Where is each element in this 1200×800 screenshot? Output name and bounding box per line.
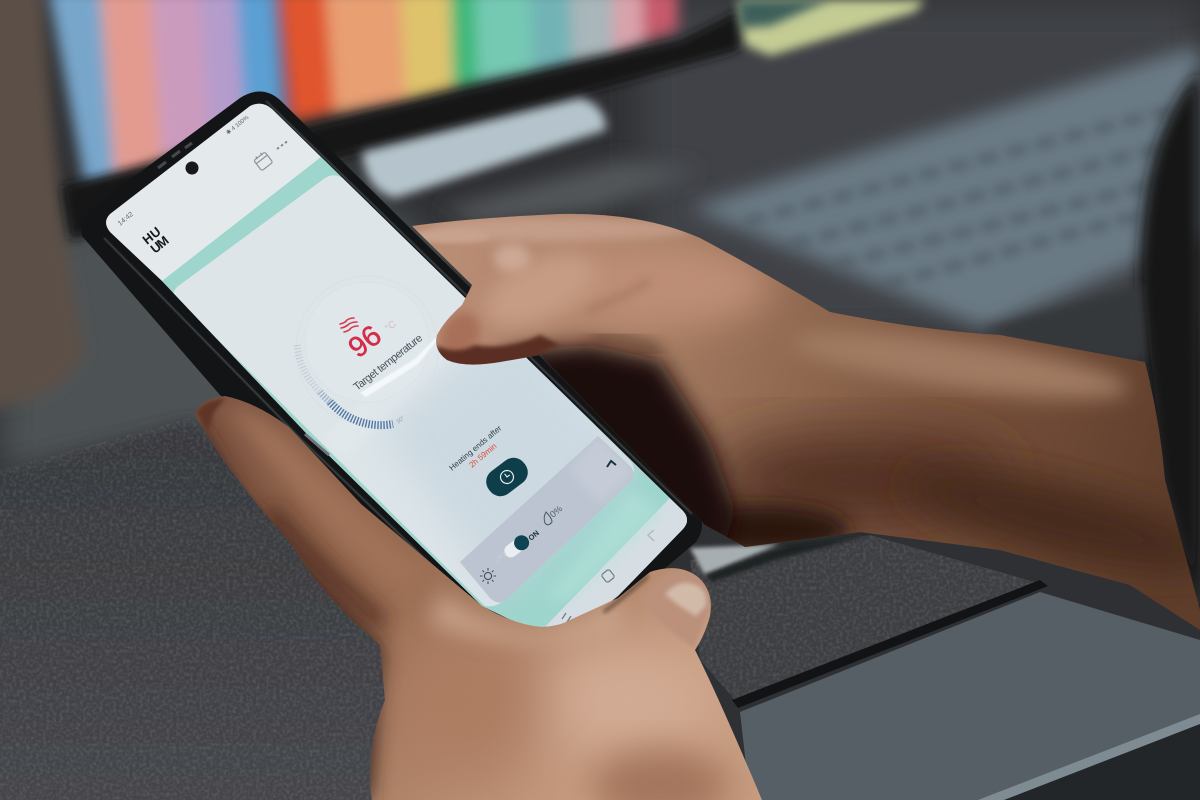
bottom control panel bbox=[460, 436, 634, 603]
yellow-green object at top bbox=[738, 0, 925, 56]
more dots bbox=[277, 142, 287, 149]
screen reflection bbox=[557, 498, 660, 597]
thumb underside shadow bbox=[180, 415, 385, 800]
speaker grille on phone edge bbox=[158, 143, 192, 168]
black mat edge bbox=[732, 580, 1048, 708]
thumb tip bbox=[432, 305, 488, 365]
thumb mid crease bbox=[270, 510, 385, 625]
tick label: 30° bbox=[396, 415, 407, 426]
off label: OFF bbox=[494, 550, 509, 565]
gauge light blue ticks bbox=[320, 392, 330, 402]
HUUM logo: HU bbox=[139, 224, 164, 247]
calendar icon bbox=[254, 152, 273, 171]
humidity icon and value bbox=[544, 506, 562, 526]
nav menu bars bbox=[562, 612, 572, 622]
sun icon bbox=[480, 568, 496, 584]
on label: ON bbox=[527, 528, 541, 543]
remaining time: 2h 59min bbox=[468, 441, 499, 470]
palm light bbox=[520, 640, 720, 760]
book spines on shelf bbox=[48, 0, 678, 185]
navigation bar bbox=[545, 498, 687, 627]
dark person silhouette right bbox=[1140, 70, 1200, 620]
dark shelf edge bbox=[62, 10, 740, 240]
heating ends label: Heating ends after bbox=[448, 423, 504, 473]
dark desk strip below keyboard bbox=[980, 285, 1145, 360]
nav back chevron bbox=[648, 530, 654, 541]
phone screen bbox=[106, 104, 687, 627]
thumb underside bbox=[436, 335, 560, 370]
left grey floor band bbox=[0, 170, 460, 480]
on off toggle bbox=[504, 535, 530, 558]
timer button bbox=[486, 458, 528, 496]
thumb top light bbox=[225, 405, 430, 590]
back of hand highlight bbox=[550, 243, 770, 327]
thumbnail shadow bbox=[196, 398, 226, 432]
pale blurred device on desk bbox=[362, 98, 606, 198]
nav home square bbox=[601, 569, 615, 583]
knuckle highlight bbox=[494, 244, 530, 272]
HUUM logo bbox=[142, 226, 170, 252]
felt desk mat bbox=[0, 400, 1050, 800]
front camera bbox=[186, 162, 198, 174]
heat waves icon bbox=[340, 318, 358, 332]
upper finger highlight bbox=[430, 218, 690, 242]
status bar time: 14:42 bbox=[117, 211, 135, 228]
wrist top light bbox=[788, 318, 1132, 412]
degree unit: °C bbox=[383, 319, 399, 334]
light strip above mat bbox=[690, 544, 780, 575]
fingers behind phone bbox=[410, 229, 490, 243]
thumb body light bbox=[473, 237, 607, 343]
gauge blue ticks bbox=[330, 402, 393, 425]
gauge inner circle bbox=[305, 282, 429, 402]
bottom finger shadow on phone bbox=[604, 576, 648, 612]
wrist shadow bbox=[710, 434, 1010, 526]
phone edge highlight bbox=[104, 101, 692, 612]
teal app background bbox=[162, 157, 695, 645]
target temperature label: Target temperature bbox=[351, 332, 425, 393]
fingertip bbox=[640, 570, 712, 648]
gauge grey ticks bbox=[297, 345, 320, 392]
keyboard bbox=[690, 45, 1200, 328]
white temperature card bbox=[174, 175, 634, 606]
card shading bbox=[390, 358, 637, 592]
right hand with thumb bbox=[412, 214, 1200, 630]
humidity icon and value: 0% bbox=[548, 504, 564, 520]
fingernail bbox=[665, 583, 706, 616]
thumb crease bbox=[590, 338, 660, 350]
left hand over phone bbox=[180, 390, 780, 800]
dark desk surface upper right bbox=[640, 0, 1200, 340]
phone contact highlight bbox=[430, 590, 622, 644]
gauge outer ring bbox=[344, 334, 438, 424]
chevron up bbox=[607, 461, 616, 467]
brown object at far left bbox=[0, 0, 85, 410]
dark palm shadow behind phone bbox=[500, 345, 735, 560]
glare over label bbox=[360, 337, 436, 396]
temperature value: 96 bbox=[343, 319, 388, 365]
phone side button bbox=[305, 434, 329, 455]
blurred grey shape under device bbox=[440, 160, 700, 225]
status icons: ✱ 4 100% bbox=[225, 114, 251, 137]
HUUM logo: UM bbox=[147, 233, 172, 256]
phone body bbox=[81, 91, 702, 645]
grey desk lower right bbox=[732, 580, 1200, 800]
